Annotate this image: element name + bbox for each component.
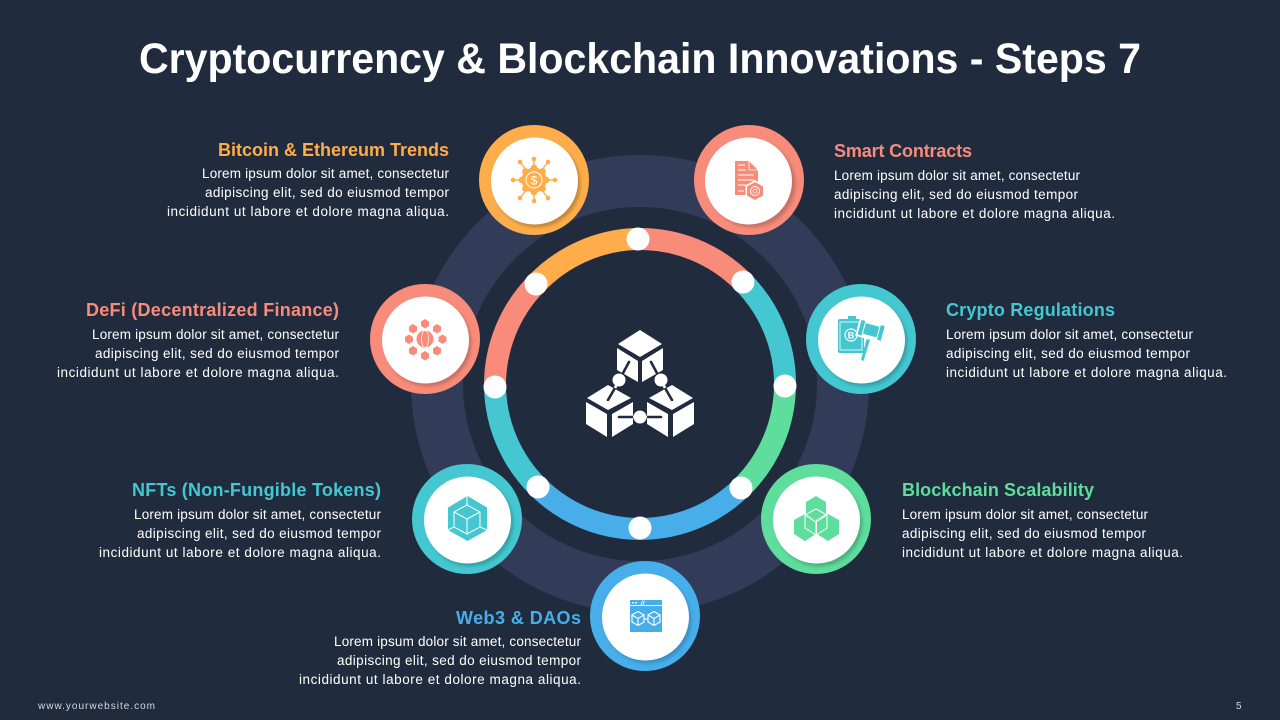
icon: coin with surrounding cubes [405, 319, 446, 360]
text block: Blockchain Scalability [902, 480, 1183, 560]
text block: Bitcoin & Ethereum Trends: Bitcoin & Ethereum Trends [218, 140, 449, 160]
text block: Smart Contracts: incididunt ut labore et dolore magna aliqua. [834, 206, 1115, 221]
text block: NFTs [99, 480, 382, 560]
icon: contract document [735, 161, 764, 202]
text block: Blockchain Scalability: incididunt ut labore et dolore magna aliqua. [902, 545, 1183, 560]
segmented colour ring [484, 228, 796, 540]
node: Bitcoin & Ethereum Trends [479, 125, 589, 235]
icon: hexagon cube [448, 496, 487, 541]
text block: Crypto Regulations [946, 300, 1227, 380]
node: Web3 & DAOs [590, 561, 700, 671]
text block: DeFi: Lorem ipsum dolor sit amet, consectetur [92, 327, 340, 342]
icon: network coin: $ [531, 174, 538, 188]
text block: Web3 & DAOs: Web3 & DAOs [456, 608, 581, 628]
text block: Blockchain Scalability: Blockchain Scalability [902, 480, 1094, 500]
text block: Web3 & DAOs: incididunt ut labore et dolore magna aliqua. [299, 672, 581, 687]
text block: Web3 & DAOs [299, 608, 582, 687]
text block: Bitcoin & Ethereum Trends: Lorem ipsum dolor sit amet, consectetur [202, 166, 450, 181]
text block: DeFi [57, 300, 340, 380]
text block: Crypto Regulations: Crypto Regulations [946, 300, 1115, 320]
node: Crypto Regulations [806, 284, 916, 394]
icon: clipboard and gavel: B [848, 330, 855, 340]
text block: Smart Contracts: Smart Contracts [834, 141, 972, 161]
text block: NFTs: NFTs (Non-Fungible Tokens) [132, 480, 381, 500]
text block: Blockchain Scalability: adipiscing elit, sed do eiusmod tempor [902, 526, 1146, 541]
text block: Crypto Regulations: Lorem ipsum dolor sit amet, consectetur [946, 327, 1194, 342]
node: Blockchain Scalability [761, 464, 871, 574]
node: NFTs [412, 464, 522, 574]
text block: Crypto Regulations: incididunt ut labore et dolore magna aliqua. [946, 365, 1227, 380]
text block: Smart Contracts: Lorem ipsum dolor sit amet, consectetur [834, 168, 1080, 183]
text block: Blockchain Scalability: Lorem ipsum dolor sit amet, consectetur [902, 507, 1148, 522]
footer website: www.yourwebsite.com [37, 701, 155, 712]
icon: browser window with cubes [630, 600, 662, 632]
text block: Smart Contracts [834, 141, 1115, 221]
icon: three hexagons and cube [794, 496, 839, 541]
text block: Web3 & DAOs: adipiscing elit, sed do eiusmod tempor [337, 653, 582, 668]
text block: Smart Contracts: adipiscing elit, sed do eiusmod tempor [834, 187, 1078, 202]
text block: Bitcoin & Ethereum Trends: incididunt ut labore et dolore magna aliqua. [167, 204, 449, 219]
text block: DeFi: DeFi (Decentralized Finance) [86, 300, 339, 320]
text block: NFTs: incididunt ut labore et dolore magna aliqua. [99, 545, 381, 560]
text block: Bitcoin & Ethereum Trends [167, 140, 450, 219]
text block: DeFi: incididunt ut labore et dolore magna aliqua. [57, 365, 339, 380]
text block: DeFi: adipiscing elit, sed do eiusmod tempor [95, 346, 340, 361]
text block: Crypto Regulations: adipiscing elit, sed do eiusmod tempor [946, 346, 1190, 361]
text block: Web3 & DAOs: Lorem ipsum dolor sit amet, consectetur [334, 634, 582, 649]
icon: central blockchain cubes [586, 330, 694, 437]
title: Cryptocurrency & Blockchain Innovations - Steps 7 [139, 35, 1141, 83]
text block: NFTs: adipiscing elit, sed do eiusmod tempor [137, 526, 382, 541]
outer background ring [437, 181, 843, 587]
node: Smart Contracts [694, 125, 804, 235]
text block: NFTs: Lorem ipsum dolor sit amet, consectetur [134, 507, 382, 522]
node: DeFi [370, 284, 480, 394]
text block: Bitcoin & Ethereum Trends: adipiscing elit, sed do eiusmod tempor [205, 185, 450, 200]
page number: 5 [1236, 701, 1242, 712]
